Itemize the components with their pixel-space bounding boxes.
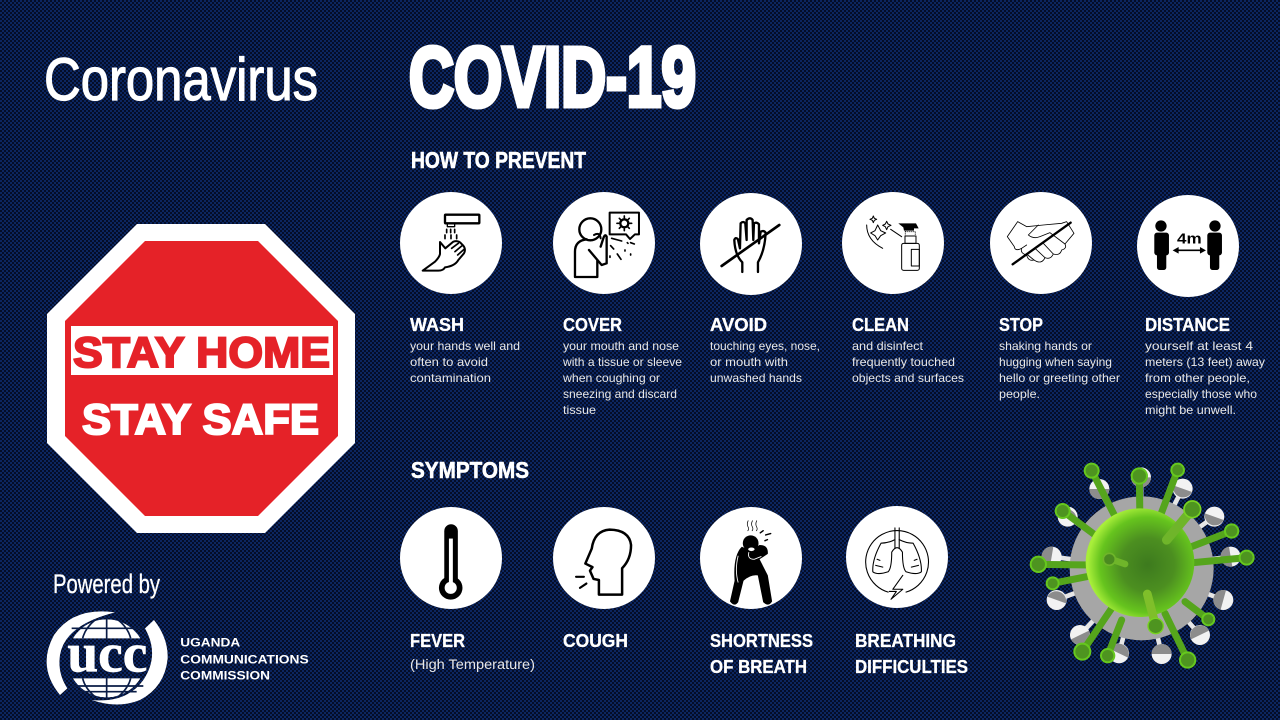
logo: Uganda Communications Commission: COMMISSION (180, 668, 270, 682)
text: stop: people. (999, 387, 1040, 401)
text: cover: COVER (563, 315, 622, 335)
text: breathing difficulties: BREATHING (855, 631, 956, 651)
text: stop: STOP (999, 315, 1043, 335)
text: avoid: touching eyes, nose, (710, 339, 820, 353)
text: distance: might be unwell. (1145, 403, 1236, 417)
icon: avoid (700, 193, 802, 295)
text: avoid: unwashed hands (710, 371, 802, 385)
text: wash: your hands well and (410, 339, 520, 353)
heading: how to prevent: HOW TO PREVENT (411, 147, 586, 173)
text: distance: yourself at least 4 (1145, 339, 1253, 353)
text: cough: COUGH (563, 631, 628, 651)
logo: Uganda Communications Commission: COMMUNICATIONS (180, 652, 309, 666)
text: clean (852, 315, 964, 385)
text: breathing difficulties (855, 631, 968, 677)
text: fever: (High Temperature) (410, 657, 535, 672)
text: distance: especially those who (1145, 387, 1257, 401)
title: Coronavirus: Coronavirus (44, 46, 318, 113)
icon: clean (842, 192, 944, 294)
text: wash (410, 315, 520, 385)
text: wash: often to avoid (410, 355, 488, 369)
icon: fever thermometer (400, 507, 502, 609)
text: avoid: AVOID (710, 315, 767, 335)
text: distance: meters (13 feet) away (1145, 355, 1265, 369)
icon: distance 4m: 4m (1177, 232, 1202, 248)
text: wash: WASH (410, 315, 464, 335)
icon: shortness of breath figure (700, 507, 802, 609)
icon: distance 4m (1137, 195, 1239, 297)
stop sign: STAY HOME (73, 329, 330, 377)
text: avoid (710, 315, 820, 385)
text: cover: sneezing and discard (563, 387, 677, 401)
icon: breathing lungs (846, 506, 948, 608)
stop sign (47, 224, 355, 533)
stop sign: STAY SAFE (82, 396, 319, 444)
logo: Uganda Communications Commission: UGANDA (180, 636, 241, 650)
text: stop: hugging when saying (999, 355, 1112, 369)
icon: cover (553, 192, 655, 294)
title: COVID-19: COVID-19 (409, 30, 696, 124)
icon: cough head (553, 507, 655, 609)
text: clean: CLEAN (852, 315, 909, 335)
text: stop: hello or greeting other (999, 371, 1120, 385)
text: shortness of breath (710, 631, 813, 677)
text: cover (562, 315, 682, 417)
icon: wash (400, 192, 502, 294)
text: clean: objects and surfaces (852, 371, 964, 385)
text: clean: frequently touched (852, 355, 955, 369)
text: cover: with a tissue or sleeve (562, 355, 682, 369)
text: wash: contamination (410, 371, 491, 385)
text: cover: when coughing or (562, 371, 660, 385)
logo: Uganda Communications Commission: ucc (67, 623, 147, 684)
heading: symptoms: SYMPTOMS (411, 457, 529, 483)
text: breathing difficulties: DIFFICULTIES (855, 657, 968, 677)
text: stop: shaking hands or (999, 339, 1092, 353)
text: fever: FEVER (410, 631, 465, 651)
text: clean: and disinfect (852, 339, 924, 353)
illustration: green virus (1031, 464, 1254, 668)
icon: stop handshake (990, 192, 1092, 294)
text: avoid: or mouth with (710, 355, 788, 369)
text: distance: DISTANCE (1145, 315, 1230, 335)
text: fever (410, 631, 535, 672)
powered by label: Powered by (53, 569, 160, 599)
text: cover: your mouth and nose (563, 339, 679, 353)
text: shortness of breath: OF BREATH (710, 657, 807, 677)
text: stop (999, 315, 1120, 401)
text: shortness of breath: SHORTNESS (710, 631, 813, 651)
text: distance (1145, 315, 1265, 417)
text: distance: from other people, (1145, 371, 1250, 385)
logo: Uganda Communications Commission (47, 611, 309, 704)
text: cover: tissue (563, 403, 596, 417)
